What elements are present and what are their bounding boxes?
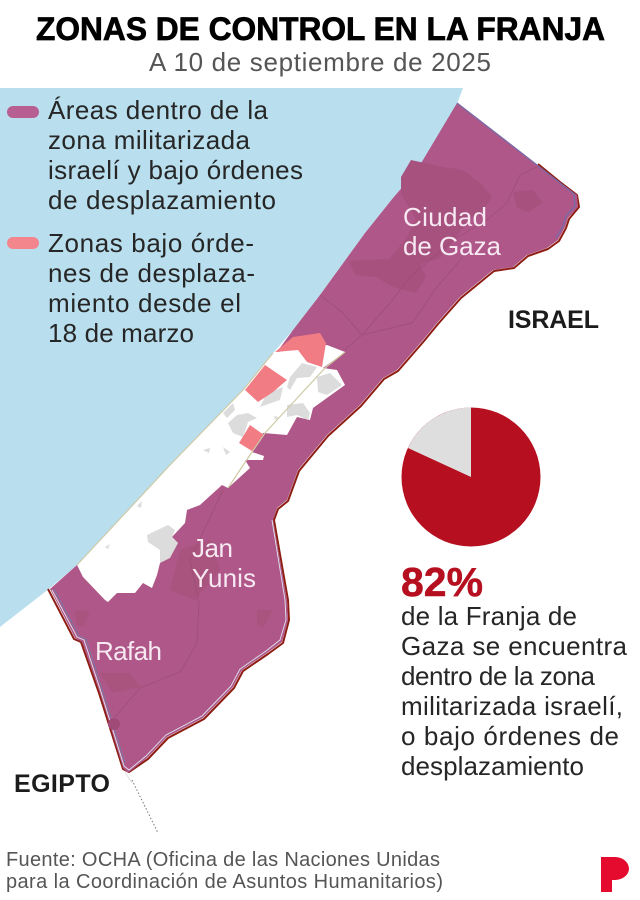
legend bbox=[7, 95, 303, 348]
legend text: displacement: miento desde el bbox=[48, 288, 241, 318]
legend swatch: displacement bbox=[7, 237, 39, 249]
label: Rafah: Rafah bbox=[95, 636, 162, 666]
legend text: militarized: de desplazamiento bbox=[48, 185, 276, 215]
displacement zones bbox=[239, 333, 326, 451]
label: Egipto: EGIPTO bbox=[14, 770, 110, 798]
label: Ciudad de Gaza: de Gaza bbox=[403, 231, 502, 261]
statistic description: dentro de la zona bbox=[401, 661, 596, 691]
statistic description: de la Franja de bbox=[401, 601, 577, 631]
title: ZONAS DE CONTROL EN LA FRANJA bbox=[36, 11, 605, 47]
roads in the north bbox=[115, 167, 537, 717]
southern fence line bbox=[52, 520, 286, 770]
white area outside the zones bbox=[77, 345, 345, 602]
legend text: displacement: nes de desplaza- bbox=[48, 258, 255, 288]
label: Israel: ISRAEL bbox=[508, 306, 599, 334]
legend swatch: militarized bbox=[7, 106, 39, 118]
source: para la Coordinación de Asuntos Humanitarios) bbox=[6, 871, 443, 893]
source: Fuente: OCHA (Oficina de las Naciones Unidas bbox=[6, 849, 440, 871]
pie chart bbox=[402, 408, 540, 546]
coastline sliver near Rafah bbox=[0, 589, 50, 628]
urban footprint: Gaza City bbox=[349, 160, 543, 293]
legend text: displacement: Zonas bajo órde- bbox=[48, 228, 254, 258]
big number: 82% bbox=[401, 559, 483, 605]
statistic description: desplazamiento bbox=[401, 751, 584, 781]
urban footprint: Jan Yunis and Rafah bbox=[75, 540, 273, 693]
legend text: militarized: zona militarizada bbox=[48, 125, 251, 155]
legend text: militarized: Áreas dentro de la bbox=[48, 95, 269, 125]
logo bbox=[601, 857, 629, 892]
label: Jan Yunis: Yunis bbox=[192, 563, 256, 593]
territory outline in red bbox=[48, 164, 579, 772]
label: Jan Yunis: Jan bbox=[192, 533, 233, 563]
subtitle: A 10 de septiembre de 2025 bbox=[149, 47, 491, 77]
legend text: displacement: 18 de marzo bbox=[48, 318, 194, 348]
militarized zone bbox=[50, 103, 578, 773]
eastern border line bbox=[457, 103, 575, 238]
statistic description: Gaza se encuentra bbox=[401, 631, 628, 661]
sea bbox=[0, 88, 463, 627]
Rafah crossing marker bbox=[108, 718, 120, 730]
dotted maritime line bbox=[132, 780, 158, 833]
statistic description: o bajo órdenes de bbox=[401, 721, 619, 751]
coastal and central roads bbox=[77, 352, 345, 565]
label: Ciudad de Gaza: Ciudad bbox=[403, 202, 487, 232]
legend text: militarized: israelí y bajo órdenes bbox=[48, 155, 303, 185]
grey built-up areas bbox=[105, 363, 342, 563]
statistic description: militarizada israelí, bbox=[401, 691, 623, 721]
map bbox=[0, 88, 579, 833]
